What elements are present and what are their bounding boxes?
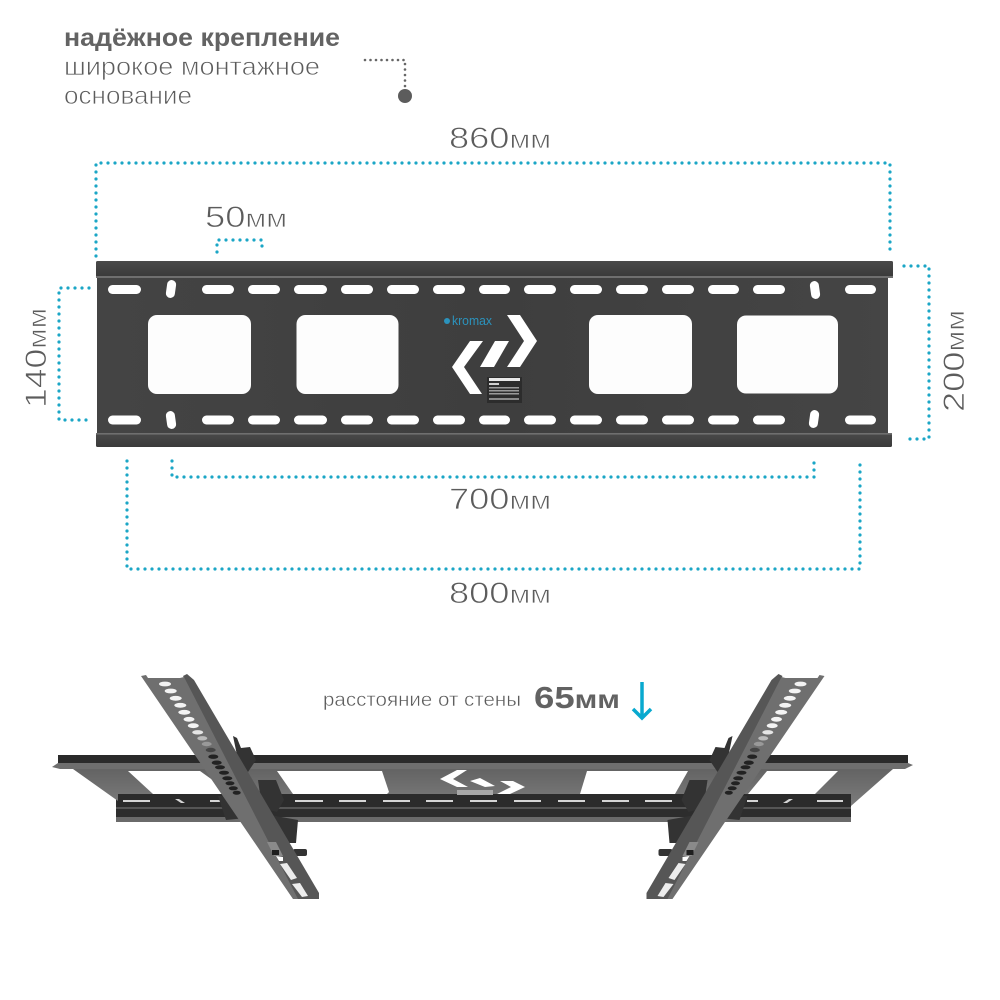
icon: down arrow xyxy=(633,682,651,718)
right arm mounting hardware xyxy=(658,736,748,856)
callout heading: надёжное крепление xyxy=(64,24,340,52)
left tilt arm xyxy=(141,674,319,899)
right tilt arm xyxy=(646,674,824,899)
dimension: 50 mm xyxy=(205,201,287,252)
slot strip xyxy=(118,794,851,807)
dimension: 860 mm: 860 мм xyxy=(449,122,551,155)
dimension: 700 mm xyxy=(172,461,814,516)
right arm flange xyxy=(646,674,782,899)
dimension: 200 mm xyxy=(904,266,971,439)
dimension: 140 mm: 140мм xyxy=(20,308,53,408)
left arm flange xyxy=(183,674,319,899)
perspective view of mount xyxy=(52,674,913,899)
dimension: 800 mm: 800 мм xyxy=(449,577,551,610)
top flange xyxy=(96,261,893,278)
right arm face xyxy=(668,675,824,899)
right arm holes xyxy=(725,682,806,795)
dimension: 700 mm: 700 мм xyxy=(449,483,551,516)
left arm lower slots xyxy=(267,842,308,897)
dimension: 860 mm xyxy=(96,122,890,256)
wall plate in perspective xyxy=(52,755,913,822)
upper slot row xyxy=(108,279,876,300)
front view of wall plate xyxy=(96,261,893,447)
label in perspective xyxy=(457,790,493,795)
arrow logo mark xyxy=(452,315,537,394)
left arm mounting hardware xyxy=(218,736,307,856)
callout body text: основание xyxy=(64,82,192,110)
brand logo: kromax xyxy=(452,313,492,328)
large windows xyxy=(148,315,838,394)
bottom flange xyxy=(96,433,892,447)
lower rail xyxy=(116,795,851,822)
lower slot row xyxy=(108,409,876,430)
callout body text xyxy=(64,53,320,110)
dimension: 50 mm: 50 мм xyxy=(205,201,287,234)
top rail xyxy=(52,755,913,769)
callout body text: широкое монтажное xyxy=(64,53,320,81)
product label sticker xyxy=(487,377,522,403)
dimension: 140 mm xyxy=(20,288,89,420)
wall distance caption: расстояние от стены xyxy=(323,690,521,711)
dimension: 800 mm xyxy=(127,461,860,610)
dimension: 200 mm: 200мм xyxy=(938,310,971,412)
thin slots xyxy=(123,799,843,803)
callout leader line xyxy=(365,60,412,103)
plate body xyxy=(97,276,888,435)
callout: reliable mounting xyxy=(64,24,412,110)
left arm holes xyxy=(159,682,241,795)
right arm lower slots xyxy=(658,842,698,897)
plate windows xyxy=(128,771,838,794)
wall distance caption: 65мм xyxy=(534,680,620,715)
arrow mark in perspective xyxy=(440,770,525,794)
left arm face xyxy=(141,675,298,899)
wall distance caption xyxy=(323,680,620,715)
plate face xyxy=(66,763,900,806)
